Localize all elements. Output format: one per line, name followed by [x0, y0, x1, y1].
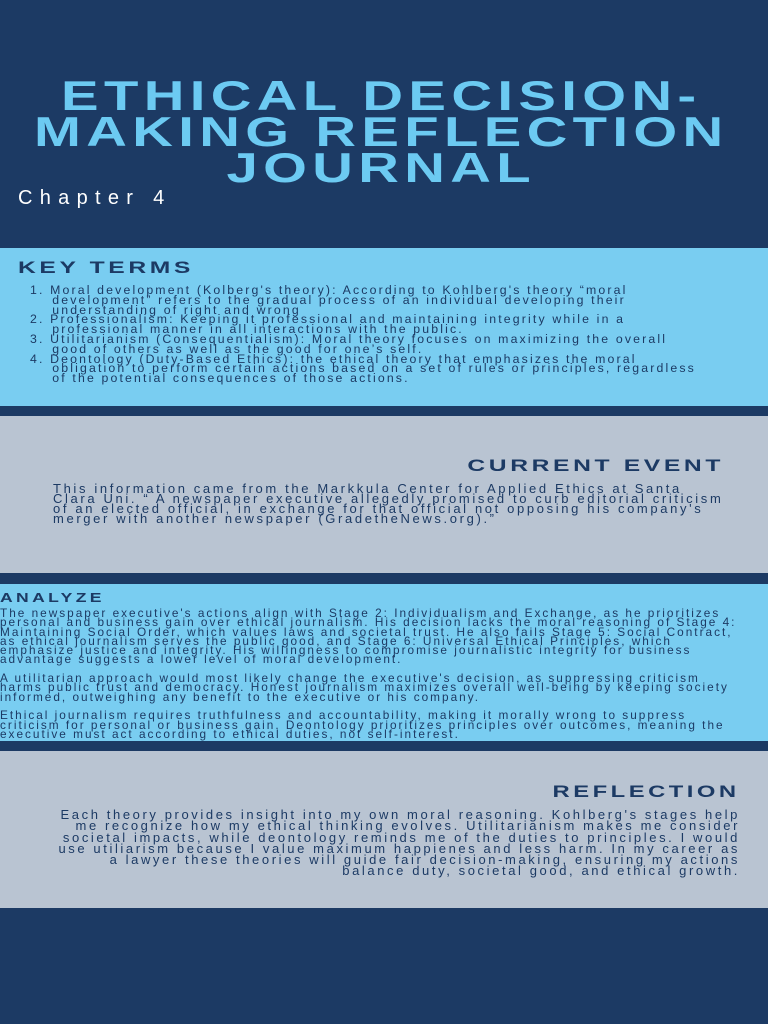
list: key terms: professional manner in all interactions with the public.	[52, 322, 464, 336]
text: analyze: The newspaper executive's actions align with Stage 2: Individualism and Exchange, as he prioritizes	[0, 606, 720, 620]
text: analyze: executive must act according to ethical duties, not self-interest.	[0, 727, 460, 741]
list: key terms: good of others as well as the good for one’s self.	[52, 342, 423, 356]
text: current event	[53, 481, 723, 526]
title	[34, 72, 729, 191]
text: analyze: criticism for personal or business gain. Deontology prioritizes principles over outcomes, meaning the	[0, 718, 725, 732]
text: current event: Clara Uni. “ A newspaper executive allegedly promised to curb editorial criticism	[53, 491, 723, 506]
text: reflection	[58, 807, 740, 878]
text: reflection: Each theory provides insight into my own moral reasoning. Kohlberg's stages help	[61, 807, 740, 822]
list: key terms: 1. Moral development (Kolberg's theory): According to Kohlberg's theory “moral	[30, 283, 628, 297]
text: analyze: informed, outweighing any benefit to the executive or his company.	[0, 690, 480, 704]
list: key terms: 4. Deontology (Duty-Based Ethics): the ethical theory that emphasizes the moral	[30, 352, 637, 366]
list: key terms	[30, 283, 696, 385]
text: analyze: advantage suggests a lower level of moral development.	[0, 652, 402, 666]
text: analyze	[0, 606, 736, 741]
text: analyze: harms public trust and democracy. Honest journalism maximizes overall well-being by keeping society	[0, 680, 729, 694]
text: analyze: A utilitarian approach would most likely change the executive's decision, as suppressing criticism	[0, 671, 700, 685]
heading: reflection: REFLECTION	[553, 782, 740, 801]
title: JOURNAL	[226, 144, 536, 191]
text: analyze: as ethical journalism serves the public good, and Stage 6: Universal Ethical Principles, which	[0, 634, 672, 648]
panel: current event	[0, 416, 768, 573]
text: analyze: personal and business gain over ethical journalism. His decision lacks the moral reasoning of Stage 4:	[0, 615, 736, 629]
text: current event: merger with another newspaper (GradetheNews.org).”	[53, 511, 497, 526]
list: key terms: 2. Professionalism: Keeping it professional and maintaining integrity while in a	[30, 312, 625, 326]
list: key terms: understanding of right and wrong	[52, 303, 301, 317]
list: key terms: 3. Utilitarianism (Consequentialism): Moral theory focuses on maximizing the overall	[30, 332, 667, 346]
list: key terms: of the potential consequences of those actions.	[52, 371, 410, 385]
text: analyze: Ethical journalism requires truthfulness and accountability, making it morally wrong to suppress	[0, 708, 686, 722]
text: reflection: use utiliarism because I value maximum happienes and less harm. In my career as	[58, 841, 740, 856]
title: MAKING REFLECTION	[34, 108, 729, 155]
text: reflection: societal impacts, while deontology reminds me of the duties to principles. I would	[63, 830, 740, 845]
heading: current event: CURRENT EVENT	[467, 456, 724, 475]
text: analyze: emphasize justice and integrity. His willingness to compromise journalistic integrity for business	[0, 643, 691, 657]
text: reflection: a lawyer these theories will guide fair decision-making, ensuring my actions	[110, 852, 740, 867]
title: ETHICAL DECISION-	[61, 72, 701, 119]
text: reflection: me recognize how my ethical thinking evolves. Utilitarianism makes me consider	[76, 818, 740, 833]
list: key terms: development” refers to the gradual process of an individual developing their	[52, 293, 626, 307]
heading: key terms: KEY TERMS	[18, 258, 194, 277]
subtitle: Chapter 4	[18, 187, 172, 209]
text: reflection: balance duty, societal good, and ethical growth.	[342, 863, 740, 878]
text: analyze: Maintaining Social Order, which values laws and societal trust. He also fails Stage 5: Social Contract,	[0, 625, 733, 639]
text: current event: This information came from the Markkula Center for Applied Ethics at Santa	[53, 481, 682, 496]
list: key terms: obligation to perform certain actions based on a set of rules or principles, regardless	[52, 361, 696, 375]
panel: reflection	[0, 751, 768, 908]
panel: analyze	[0, 584, 768, 741]
panel: key terms	[0, 248, 768, 406]
heading: analyze: ANALYZE	[0, 590, 105, 605]
text: current event: of an elected official, in exchange for that official not opposing his company's	[53, 501, 703, 516]
